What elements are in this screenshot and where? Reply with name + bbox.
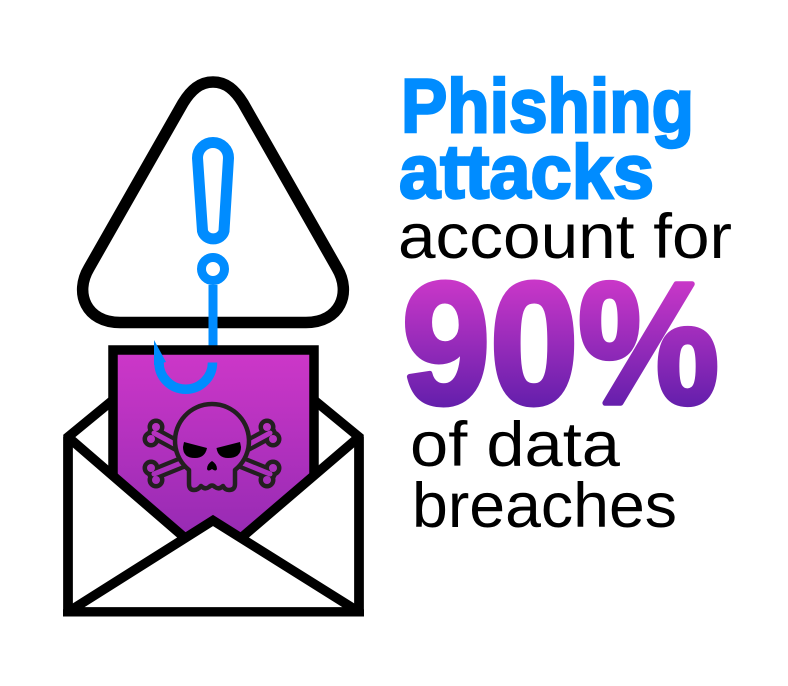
skull and crossbones xyxy=(142,404,282,490)
text: account for: account for xyxy=(398,202,732,272)
text: of data breaches: of data xyxy=(410,410,621,480)
letter border xyxy=(113,350,314,476)
icon: exclamation mark and fishing line xyxy=(198,142,228,350)
big number: 90%: 90% xyxy=(402,246,719,440)
infographic xyxy=(63,76,731,616)
icon: warning triangle xyxy=(83,82,343,322)
icon: fish hook xyxy=(154,340,212,389)
envelope front flap xyxy=(68,520,359,612)
heading: Phishing attacks: attacks xyxy=(399,130,654,215)
heading: Phishing attacks xyxy=(399,64,694,215)
envelope back xyxy=(68,400,359,612)
text: of data breaches: breaches xyxy=(412,471,677,541)
text: of data breaches xyxy=(410,410,677,541)
heading: Phishing attacks: Phishing xyxy=(401,64,694,149)
envelope V lines xyxy=(68,437,359,538)
icon: open envelope with skull letter xyxy=(68,350,359,612)
letter fill xyxy=(113,350,314,537)
